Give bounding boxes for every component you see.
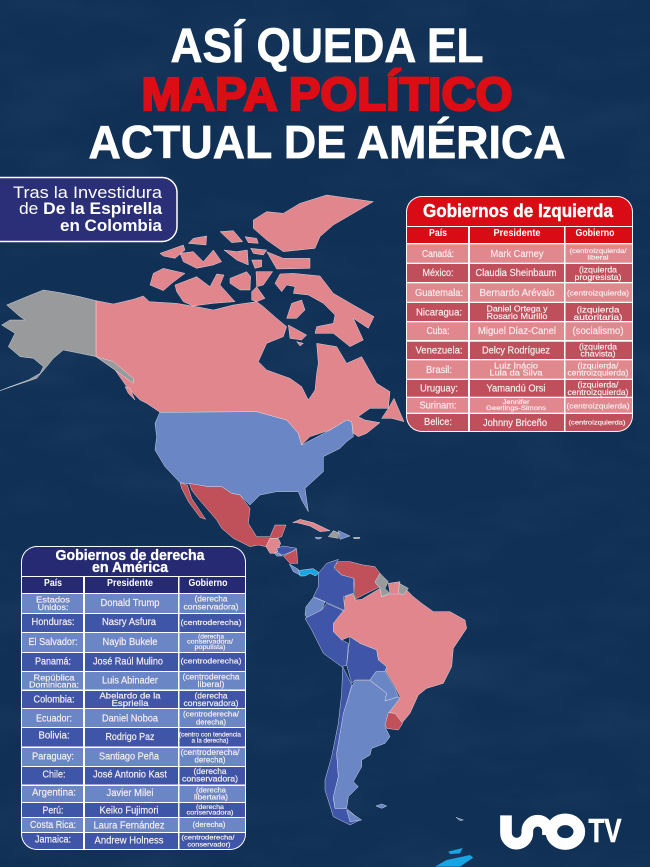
table rows: izquierda: México: — [422, 268, 454, 279]
title — [88, 19, 566, 168]
country: French Guiana — [398, 583, 408, 595]
country: Brazil — [332, 588, 467, 723]
subtitle badge: de De la Espirella — [19, 199, 163, 218]
table rows: izquierda: progresista) — [574, 272, 622, 282]
country: Uruguay — [385, 713, 403, 730]
table rows: izquierda: chavista) — [580, 349, 616, 359]
table rows: derecha: libertaria) — [194, 792, 229, 801]
table rows: izquierda: (centroizquierda/ — [570, 248, 627, 255]
country: Costa Rica — [289, 564, 300, 575]
country: Cuba — [293, 519, 330, 532]
table rows: izquierda: Lula da Silva — [490, 368, 543, 378]
table rows: derecha: (derecha — [198, 633, 224, 640]
table rows: izquierda — [415, 248, 630, 429]
table rows: derecha: Honduras: — [32, 617, 74, 628]
heading: derecha — [56, 547, 205, 576]
table rows: derecha: República — [34, 672, 75, 682]
table rows: derecha: (centroderecha) — [180, 656, 242, 666]
table rows: derecha: Unidos: — [38, 602, 68, 612]
table rows: izquierda: Bernardo Arévalo — [480, 288, 555, 299]
South Georgia — [456, 817, 463, 821]
map of the Americas — [0, 195, 473, 867]
table rows: izquierda: Guatemala: — [415, 288, 463, 299]
table rows: derecha: Santiago Peña — [99, 751, 159, 762]
table rows: izquierda: Johnny Briceño — [483, 418, 547, 429]
table rows: derecha: Estados — [36, 595, 70, 605]
table rows: derecha: conservadora) — [184, 698, 239, 708]
country: Guyana — [375, 573, 390, 597]
table rows: derecha: a la derecha) — [192, 737, 228, 744]
table rows: izquierda: Uruguay: — [420, 384, 458, 395]
table rows: izquierda: Cuba: — [426, 326, 450, 337]
table rows: izquierda: Venezuela: — [416, 346, 462, 356]
country: Chile — [325, 667, 360, 825]
country: Canada — [96, 195, 404, 445]
country: Haiti — [328, 531, 338, 538]
table rows: derecha: conservador) — [188, 841, 230, 848]
table rows: derecha: (centro con tendencia — [179, 732, 241, 739]
country: Suriname — [388, 582, 400, 593]
country: Colombia — [313, 559, 354, 610]
table rows: izquierda: Daniel Ortega y — [486, 304, 548, 314]
column headers — [44, 578, 228, 589]
table rows: izquierda: Luiz Inácio — [494, 360, 538, 370]
North map group — [0, 195, 404, 445]
table rows: izquierda: centroizquierda) — [568, 387, 629, 397]
table rows: izquierda: centroizquierda) — [568, 368, 629, 378]
logo: UNO TV — [506, 812, 622, 849]
table rows: derecha: Colombia: — [34, 694, 74, 705]
South map group — [305, 559, 473, 867]
table rows: derecha: conservadora/ — [187, 639, 233, 646]
table rows: derecha: Costa Rica: — [30, 820, 76, 831]
table rows: derecha: (derecha — [196, 786, 227, 795]
title: MAPA POLÍTICO — [142, 68, 512, 120]
table rows: izquierda: Delcy Rodríguez — [482, 346, 550, 356]
table rows: derecha: Panamá: — [35, 656, 71, 667]
table rows: derecha: Donald Trump — [100, 598, 160, 609]
table rows: izquierda: Brasil: — [426, 365, 452, 376]
table rows: izquierda: Claudia Sheinbaum — [476, 268, 556, 279]
table rows: derecha: (centroderecha) — [180, 618, 242, 627]
table rows: derecha: (derecha) — [192, 820, 226, 829]
table rows: derecha: Chile: — [42, 769, 66, 780]
table rows: izquierda: (centroizquierda) — [567, 288, 630, 297]
table rows: izquierda: (socialismo) — [572, 326, 624, 337]
country: Panama — [299, 569, 319, 576]
table rows: izquierda: Belice: — [424, 417, 452, 428]
table rows: derecha — [28, 594, 242, 848]
table rows: derecha: (centroderecha/ — [183, 710, 240, 719]
table rows: derecha: Keiko Fujimori — [100, 805, 158, 816]
table rows: izquierda: autoritaria) — [574, 312, 623, 322]
table rows: izquierda: (izquierda — [576, 304, 620, 314]
table rows: derecha: Paraguay: — [32, 751, 74, 762]
country: Puerto Rico — [353, 537, 360, 539]
table rows: izquierda: Surinam: — [420, 400, 456, 411]
column headers: País — [429, 228, 447, 239]
column headers — [429, 228, 614, 239]
table rows: derecha: Laura Fernández — [94, 820, 164, 831]
column headers: Gobierno — [188, 578, 228, 589]
table rows: derecha: José Antonio Kast — [93, 769, 167, 780]
country: Mexico — [180, 483, 286, 547]
table rows: derecha: Dominicana: — [29, 680, 79, 690]
table rows: derecha: Javier Milei — [106, 788, 154, 799]
table rows: izquierda: Jennifer — [502, 399, 530, 406]
country: Argentina — [333, 681, 400, 822]
table rows: derecha: (derecha — [196, 804, 224, 811]
table rows: izquierda: (izquierda/ — [578, 380, 619, 390]
country: Guatemala — [266, 538, 281, 553]
panel: gobiernos de izquierda — [406, 196, 633, 432]
column headers: Presidente — [107, 578, 153, 589]
table rows: derecha: José Raúl Mulino — [93, 656, 163, 667]
heading: izquierda: Gobiernos de Izquierda — [423, 201, 614, 221]
table rows: derecha: (centroderecha — [182, 671, 240, 681]
table rows: derecha: Argentina: — [32, 788, 76, 799]
country: El Salvador — [274, 553, 283, 556]
heading: derecha: Gobiernos de derecha — [56, 547, 205, 564]
panel: gobiernos de derecha — [21, 546, 246, 850]
table rows: derecha: Andrew Holness — [94, 835, 164, 846]
column headers: País — [44, 578, 62, 589]
subtitle badge: Tras la Investidura — [13, 183, 163, 202]
table rows: derecha: Nasry Asfura — [102, 617, 156, 628]
column headers: Presidente — [494, 228, 541, 239]
subtitle badge: en Colombia — [60, 216, 163, 235]
table rows: derecha: Perú: — [42, 805, 64, 816]
table rows: izquierda: (centroizquierda) — [568, 420, 626, 426]
country: Venezuela — [334, 562, 380, 599]
table rows: derecha: Daniel Noboa — [102, 714, 158, 725]
country: Honduras — [277, 546, 297, 555]
table rows: derecha: liberal) — [198, 679, 225, 689]
table rows: derecha: derecha) — [194, 755, 226, 765]
table rows: derecha: conservadora) — [186, 809, 234, 816]
table rows: derecha: (derecha — [194, 594, 228, 604]
table rows: izquierda: (izquierda — [579, 264, 617, 274]
title: ACTUAL DE AMÉRICA — [88, 116, 566, 168]
table rows: derecha: Jamaica: — [35, 835, 71, 846]
Central map group — [180, 483, 360, 576]
table rows: derecha: (derecha — [194, 766, 227, 776]
table rows: derecha: (centroderecha/ — [180, 747, 240, 757]
logo: UNO TV: TV — [588, 812, 622, 849]
Falkland Islands — [376, 804, 387, 808]
country: Bolivia — [347, 637, 387, 683]
country: Dominican Republic — [338, 531, 350, 539]
table rows: derecha: El Salvador: — [28, 637, 78, 648]
table rows: izquierda: Mark Carney — [490, 249, 544, 260]
subtitle badge — [0, 178, 177, 242]
table rows: izquierda: Geerlings-Simons — [486, 405, 547, 412]
table rows: derecha: Nayib Bukele — [102, 637, 158, 648]
country: Nicaragua — [283, 549, 298, 563]
table rows: derecha: Rodrigo Paz — [106, 732, 154, 743]
table rows: derecha: Luis Abinader — [102, 676, 159, 686]
table rows: derecha: Abelardo de la — [100, 690, 161, 700]
table rows: derecha: (derecha — [194, 690, 228, 700]
country: Jamaica — [315, 537, 322, 539]
table rows: izquierda: Nicaragua: — [416, 308, 462, 318]
country: Paraguay — [370, 672, 398, 701]
table rows: derecha: conservadora) — [184, 601, 239, 611]
table rows: derecha: conservadora) — [182, 774, 238, 784]
table rows: derecha: Bolivia: — [38, 730, 70, 741]
country: Peru — [305, 603, 348, 667]
table rows: izquierda: (centroizquierda) — [566, 401, 630, 410]
table rows: derecha: populista) — [194, 644, 226, 651]
title: ASÍ QUEDA EL — [170, 19, 484, 73]
table rows: derecha: Espriella — [112, 698, 149, 708]
column headers: Gobierno — [576, 228, 614, 239]
Antarctic tip — [435, 848, 473, 867]
table rows: izquierda: Rosario Murillo — [486, 311, 548, 321]
table rows: izquierda: (izquierda — [579, 341, 617, 351]
table rows: derecha: Ecuador: — [36, 714, 72, 725]
country: United States — [155, 412, 353, 512]
table rows: izquierda: (izquierda/ — [578, 360, 619, 370]
table rows: izquierda: Canadá: — [422, 249, 454, 260]
table rows: izquierda: liberal — [588, 254, 609, 262]
table rows: izquierda: Yamandú Orsi — [486, 384, 546, 395]
country: Ecuador — [305, 597, 325, 619]
heading: derecha: en América — [92, 559, 169, 576]
country: Alaska — [0, 290, 133, 391]
table rows: izquierda: Miguel Díaz-Canel — [478, 326, 556, 337]
United States group — [155, 412, 353, 512]
table rows: derecha: (centroderecha/ — [182, 835, 235, 842]
table rows: derecha: derecha) — [196, 717, 227, 726]
